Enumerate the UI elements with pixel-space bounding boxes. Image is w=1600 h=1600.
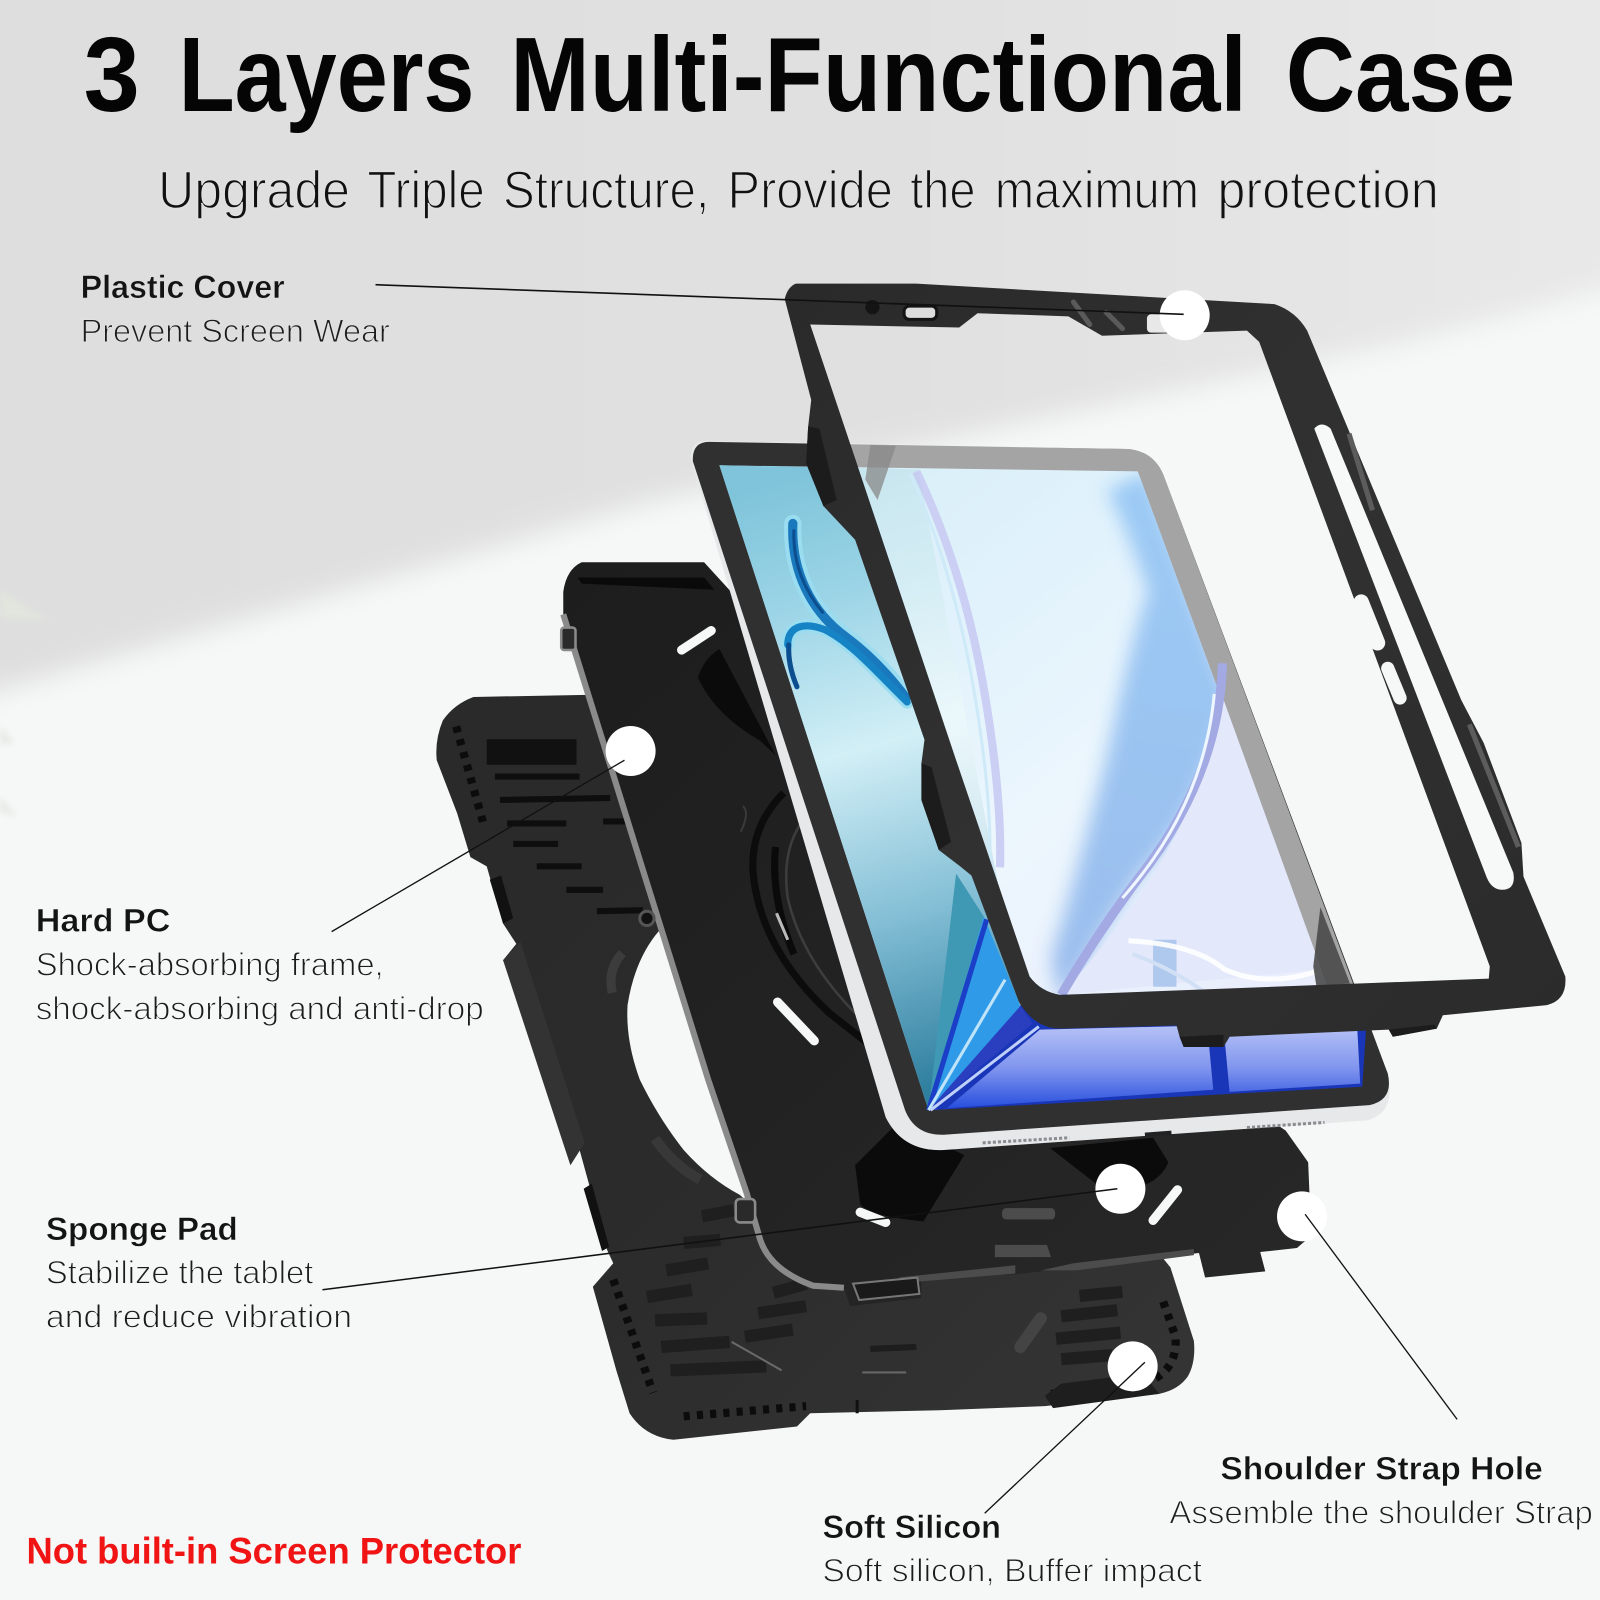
subtitle: protection	[1217, 161, 1439, 220]
leader line	[376, 285, 1184, 314]
frame clips	[806, 427, 1437, 1047]
leader line	[1305, 1214, 1457, 1419]
callout: sponge pad	[46, 1164, 1145, 1335]
warning note: Not built-in Screen Protector	[27, 1530, 521, 1571]
hole in the silicon case	[627, 923, 750, 1204]
deep blue lower panels	[929, 1005, 1367, 1110]
tooth edge	[456, 727, 1176, 1416]
strap lugs	[561, 628, 755, 1222]
heading: Sponge Pad	[46, 1210, 238, 1247]
leader line	[322, 1189, 1117, 1290]
callout: plastic cover	[81, 268, 1210, 349]
clear glass cover over the tablet, inside the plastic frame	[850, 444, 1353, 995]
ring mount	[741, 793, 898, 1051]
front layer: plastic frame	[785, 284, 1565, 1047]
blue fan bottom left	[929, 873, 984, 1110]
silver edge of hard PC	[563, 614, 844, 1288]
ports and speakers	[983, 1122, 1324, 1143]
marker dot	[1160, 290, 1210, 340]
silver tablet body	[691, 441, 1390, 1150]
subtitle: Triple	[367, 161, 485, 220]
blue band right	[1051, 471, 1230, 1005]
left wave area	[719, 465, 1020, 1110]
subtitle: Provide	[728, 161, 893, 220]
screen	[719, 465, 1367, 1110]
bottom corner bumper	[1045, 1373, 1159, 1408]
wave strokes	[788, 523, 907, 702]
marker dot	[1108, 1341, 1158, 1391]
small tab details	[853, 1208, 1194, 1300]
tablet	[691, 441, 1390, 1150]
description: Assemble the shoulder Strap	[1169, 1493, 1593, 1530]
glass edge shading	[865, 445, 1350, 986]
subtitle	[158, 161, 1439, 220]
subtitle: Structure,	[503, 161, 709, 220]
callout: hard PC	[36, 726, 656, 1026]
black sponge pads	[698, 649, 1168, 1221]
upper ridges	[487, 752, 643, 911]
heading: Soft Silicon	[822, 1508, 1001, 1545]
leader line	[332, 760, 624, 932]
white slots	[682, 631, 1178, 1222]
side buttons and case details	[490, 876, 1041, 1413]
marker dot	[606, 726, 656, 776]
right outer ridges	[1349, 434, 1518, 847]
subtitle: Upgrade	[158, 161, 350, 220]
lower ridges	[647, 1210, 1122, 1370]
callout: soft silicon	[822, 1341, 1202, 1589]
subtitle: the	[910, 161, 976, 220]
title: Layers	[179, 16, 474, 134]
heading: Shoulder Strap Hole	[1220, 1450, 1543, 1487]
subtitle: maximum	[995, 161, 1199, 220]
title	[84, 16, 1515, 134]
pale violet area	[1061, 694, 1321, 995]
title: Case	[1286, 16, 1515, 134]
frame top highlights	[1073, 302, 1122, 329]
swirl lower right	[1129, 940, 1316, 992]
description: Soft silicon, Buffer impact	[822, 1552, 1202, 1589]
description line 1: Shock-absorbing frame,	[36, 946, 384, 983]
description line 2: and reduce vibration	[46, 1298, 352, 1335]
leader line	[985, 1362, 1145, 1513]
frame openings	[865, 300, 1514, 890]
swoop strokes	[910, 471, 1222, 995]
heading: Plastic Cover	[81, 268, 285, 305]
top inner lip	[578, 578, 714, 590]
back layer: soft silicon case	[436, 695, 1194, 1440]
title: Multi-Functional	[510, 16, 1247, 134]
description: Prevent Screen Wear	[81, 312, 390, 349]
heading: Hard PC	[36, 902, 170, 939]
side lug	[640, 911, 654, 926]
callout: shoulder strap hole	[1169, 1191, 1593, 1530]
description line 2: shock-absorbing and anti-drop	[36, 989, 484, 1026]
marker dot	[1277, 1191, 1327, 1241]
description line 1: Stabilize the tablet	[46, 1254, 313, 1291]
dark bezel	[693, 442, 1389, 1135]
title: 3	[84, 16, 140, 134]
middle layer: hard PC frame	[561, 562, 1311, 1306]
marker dot	[1095, 1164, 1145, 1214]
